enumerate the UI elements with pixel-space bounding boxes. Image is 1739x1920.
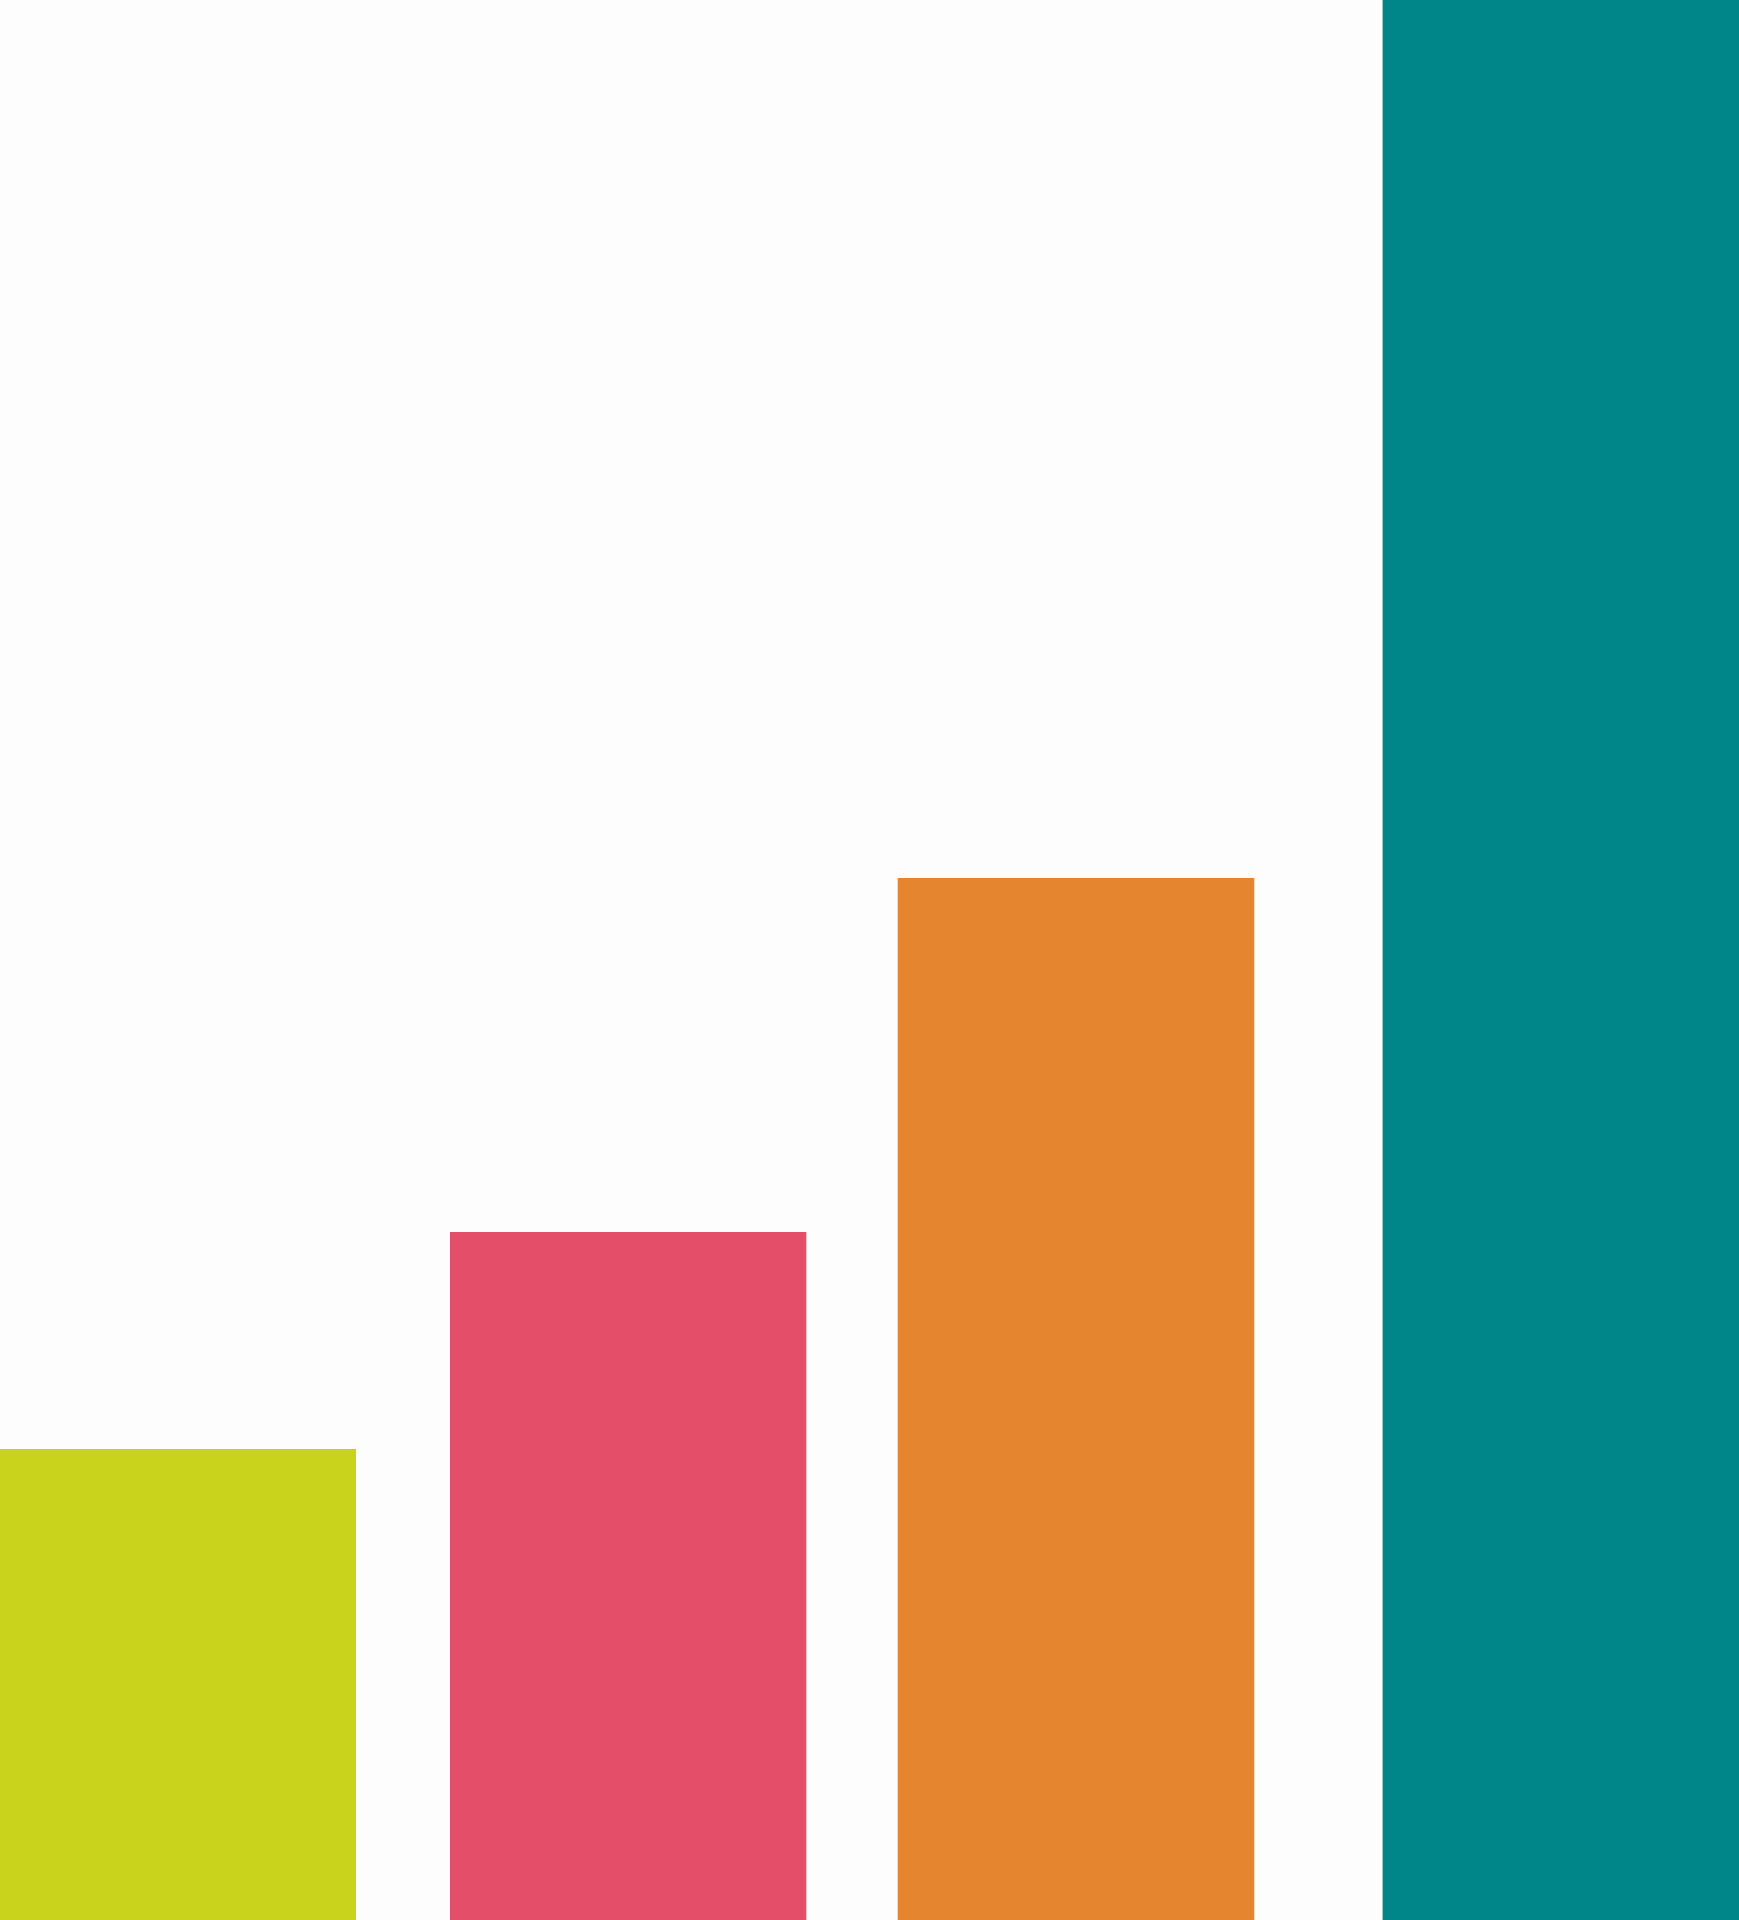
bar 4: teal [1383,0,1739,1920]
bar 1: yellow-green [0,1449,356,1920]
bar 3: orange [898,878,1254,1920]
bar 2: pink-red [450,1232,806,1920]
